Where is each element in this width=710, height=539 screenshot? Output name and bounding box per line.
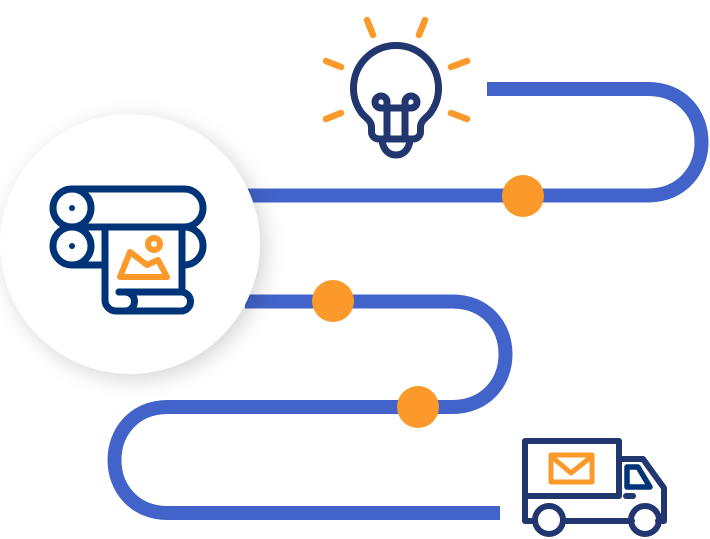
icon: light bulb [326, 20, 467, 155]
icon: delivery truck with envelope [525, 441, 664, 534]
route marker dot 3 [397, 386, 439, 428]
icon circle: printer background [0, 114, 260, 374]
icon: printer with image roll [53, 189, 203, 311]
route marker dot 2 [312, 280, 354, 322]
route marker dot 1 [502, 175, 544, 217]
